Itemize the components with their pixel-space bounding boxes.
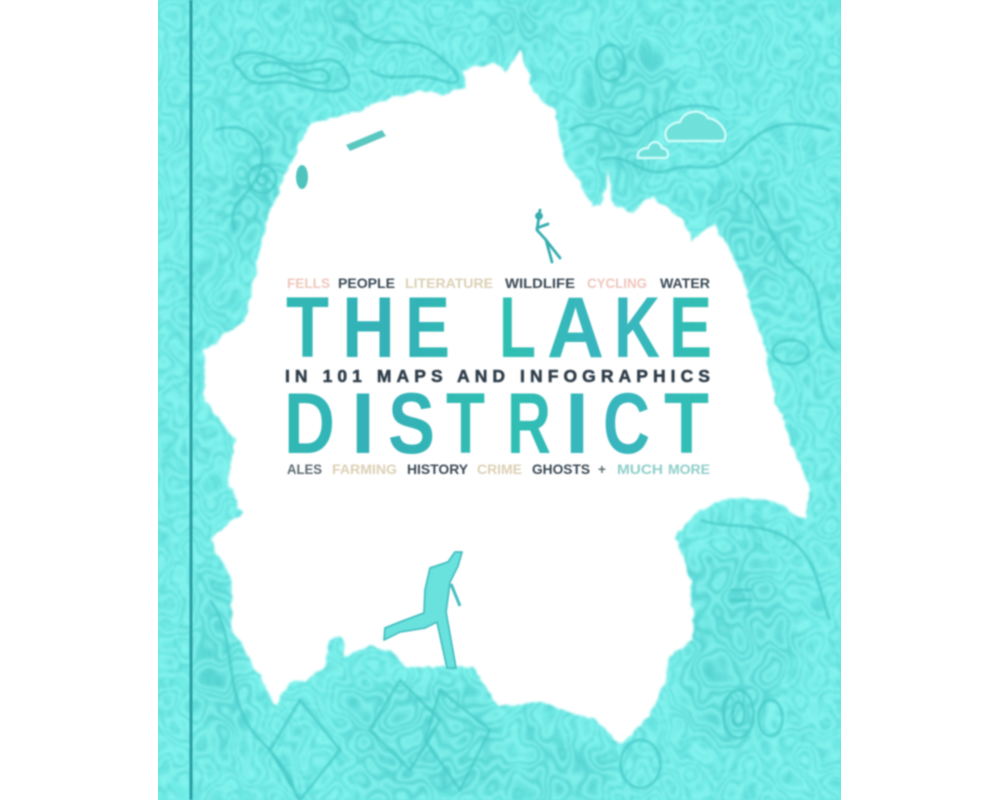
text: top subject words bbox=[287, 276, 710, 291]
map light texture bbox=[158, 0, 841, 800]
title: DISTRICT: T bbox=[446, 376, 485, 472]
panel: white map silhouette bbox=[205, 50, 810, 745]
icon: runner figure bbox=[384, 552, 462, 668]
icon: climber bbox=[536, 210, 560, 262]
text: top subject words: CYCLING bbox=[587, 276, 647, 291]
text: bottom subject words: GHOSTS bbox=[532, 462, 590, 477]
text: bottom subject words: ALES bbox=[287, 462, 322, 477]
map contour texture bbox=[158, 0, 841, 800]
text: top subject words: LITERATURE bbox=[405, 276, 493, 291]
title: DISTRICT: I bbox=[351, 376, 375, 472]
title: THE LAKE: E bbox=[669, 280, 712, 376]
text: bottom subject words: HISTORY bbox=[407, 462, 468, 477]
text: bottom subject words: FARMING bbox=[332, 462, 397, 477]
title: DISTRICT: T bbox=[664, 376, 709, 472]
text: bottom subject words: MORE bbox=[668, 462, 710, 477]
icon: clouds bbox=[638, 112, 725, 158]
title: THE LAKE: E bbox=[405, 280, 450, 376]
icon: tarn on left edge bbox=[296, 165, 308, 189]
title: DISTRICT: C bbox=[603, 376, 650, 472]
title: DISTRICT bbox=[284, 376, 709, 472]
text: top subject words: PEOPLE bbox=[338, 276, 395, 291]
title: DISTRICT: D bbox=[284, 376, 335, 472]
map shading patches bbox=[195, 0, 800, 800]
title: DISTRICT: S bbox=[388, 376, 435, 472]
title: THE LAKE: L bbox=[499, 280, 536, 376]
text: top subject words: WILDLIFE bbox=[505, 276, 575, 291]
title: THE LAKE: K bbox=[614, 280, 660, 376]
title: THE LAKE bbox=[286, 280, 712, 376]
subtitle: IN 101 MAPS AND INFOGRAPHICS bbox=[285, 366, 710, 386]
map drawn lines bbox=[210, 20, 835, 800]
text: bottom subject words: + bbox=[598, 462, 606, 477]
text: bottom subject words: MUCH bbox=[617, 462, 663, 477]
title: THE LAKE: T bbox=[286, 280, 329, 376]
icon: lake mark bbox=[346, 130, 386, 151]
title: DISTRICT: R bbox=[507, 376, 551, 472]
text: bottom subject words: CRIME bbox=[477, 462, 522, 477]
title: DISTRICT: I bbox=[565, 376, 589, 472]
title: THE LAKE: A bbox=[547, 280, 604, 376]
text: bottom subject words bbox=[287, 462, 710, 477]
text: top subject words: FELLS bbox=[287, 276, 330, 291]
spine line bbox=[190, 0, 192, 800]
title: THE LAKE: H bbox=[342, 280, 395, 376]
text: top subject words: WATER bbox=[660, 276, 710, 291]
panel: book cover map background bbox=[158, 0, 841, 800]
